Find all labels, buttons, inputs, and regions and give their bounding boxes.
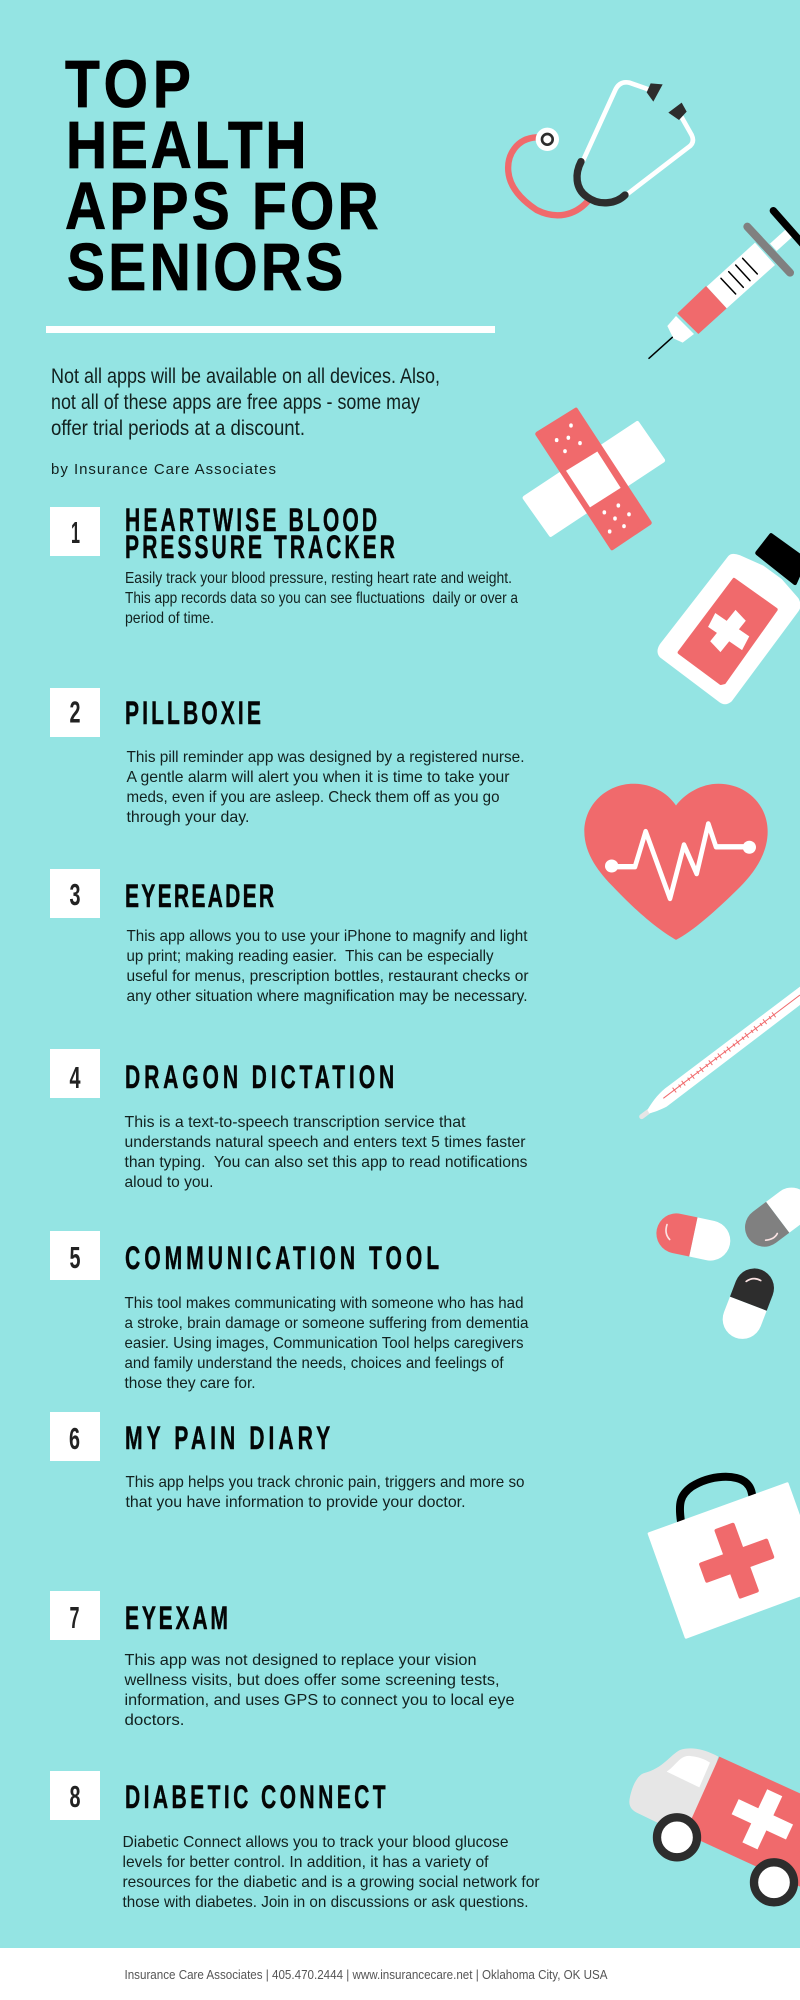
- footer text: Insurance Care Associates | 405.470.2444 | www.insurancecare.net | Oklahoma City, OK USA: [124, 1968, 608, 1982]
- body 4: aloud to you.: [124, 1174, 214, 1191]
- icon: bandage: [525, 410, 663, 548]
- item 3: [50, 869, 529, 1005]
- title: TOP: [65, 48, 191, 122]
- body 6: [126, 1474, 525, 1511]
- heading 6: MY PAIN DIARY: [125, 1419, 330, 1456]
- body 3: This app allows you to use your iPhone to magnify and light: [126, 928, 528, 945]
- number box 8: [50, 1771, 100, 1820]
- title: [65, 48, 379, 305]
- title: SENIORS: [67, 231, 343, 305]
- item 7: [50, 1591, 515, 1729]
- body 2: meds, even if you are asleep. Check them off as you go: [126, 789, 500, 806]
- item 6: [50, 1412, 525, 1511]
- number box 7: 7: [70, 1600, 80, 1635]
- number box 3: 3: [70, 877, 80, 912]
- body 4: than typing. You can also set this app to read notifications: [124, 1154, 528, 1171]
- number box 7: [50, 1591, 100, 1640]
- body 7: [123, 1652, 515, 1729]
- icon: pills: [653, 1180, 800, 1345]
- body 4: understands natural speech and enters text 5 times faster: [124, 1134, 526, 1151]
- title underline: [46, 326, 495, 333]
- body 1: period of time.: [125, 610, 214, 627]
- body 5: This tool makes communicating with someone who has had: [124, 1295, 524, 1312]
- body 3: [126, 928, 529, 1005]
- body 2: This pill reminder app was designed by a registered nurse.: [126, 749, 524, 766]
- body 7: This app was not designed to replace your vision: [124, 1652, 477, 1669]
- title: APPS FOR: [65, 170, 379, 244]
- byline: by Insurance Care Associates: [51, 461, 276, 478]
- body 8: levels for better control. In addition, it has a variety of: [122, 1854, 489, 1871]
- body 6: This app helps you track chronic pain, triggers and more so: [126, 1474, 525, 1491]
- footer band: [0, 1948, 800, 2000]
- heading 7: EYEXAM: [125, 1599, 228, 1636]
- item 1: [50, 501, 518, 627]
- icon: first aid kit: [649, 1477, 800, 1637]
- number box 1: 1: [71, 515, 80, 550]
- number box 6: 6: [69, 1421, 80, 1456]
- body 1: This app records data so you can see fluctuations daily or over a: [125, 590, 518, 607]
- number box 6: [50, 1412, 100, 1461]
- body 4: This is a text-to-speech transcription service that: [124, 1114, 466, 1131]
- item 5: [50, 1231, 529, 1392]
- icon: heart with heartbeat: [584, 784, 768, 940]
- body 4: [124, 1114, 528, 1191]
- intro text: Not all apps will be available on all devices. Also,: [51, 365, 440, 388]
- heading 3: EYEREADER: [125, 877, 274, 914]
- item 4: [50, 1049, 528, 1191]
- body 5: easier. Using images, Communication Tool helps caregivers: [124, 1335, 524, 1352]
- number box 5: [50, 1231, 100, 1280]
- body 1: [125, 570, 518, 627]
- body 5: a stroke, brain damage or someone suffering from dementia: [124, 1315, 529, 1332]
- body 3: useful for menus, prescription bottles, restaurant checks or: [126, 968, 529, 985]
- number box 4: 4: [70, 1060, 81, 1095]
- body 1: Easily track your blood pressure, resting heart rate and weight.: [125, 570, 512, 587]
- body 3: any other situation where magnification may be necessary.: [126, 988, 528, 1005]
- gray pill: [737, 1180, 800, 1254]
- number box 5: 5: [70, 1240, 80, 1275]
- body 3: up print; making reading easier. This can be especially: [126, 948, 494, 965]
- heading 2: PILLBOXIE: [125, 694, 261, 731]
- heading 1: [125, 501, 395, 565]
- title: HEALTH: [66, 109, 307, 183]
- number box 2: [50, 688, 100, 737]
- body 8: Diabetic Connect allows you to track your blood glucose: [122, 1834, 509, 1851]
- icon: syringe: [649, 211, 800, 358]
- number box 2: 2: [70, 694, 80, 730]
- body 8: resources for the diabetic and is a growing social network for: [122, 1874, 540, 1891]
- body 6: that you have information to provide your doctor.: [126, 1494, 466, 1511]
- icon: medicine bottle: [657, 535, 800, 704]
- item 2: [50, 688, 524, 826]
- body 2: [126, 749, 524, 826]
- intro text: offer trial periods at a discount.: [51, 417, 305, 440]
- icon: ambulance: [629, 1748, 800, 1902]
- body 8: those with diabetes. Join in on discussions or ask questions.: [122, 1894, 528, 1911]
- icon: stethoscope: [508, 82, 693, 215]
- icon: thermometer: [642, 987, 800, 1117]
- body 5: those they care for.: [124, 1375, 256, 1392]
- heading 4: DRAGON DICTATION: [125, 1058, 394, 1095]
- body 2: A gentle alarm will alert you when it is time to take your: [126, 769, 510, 786]
- intro text: not all of these apps are free apps - some may: [51, 391, 420, 414]
- heading 8: DIABETIC CONNECT: [125, 1778, 386, 1815]
- heading 5: COMMUNICATION TOOL: [125, 1239, 439, 1276]
- body 7: doctors.: [124, 1712, 184, 1729]
- body 7: wellness visits, but does offer some screening tests,: [123, 1672, 499, 1689]
- number box 4: [50, 1049, 100, 1098]
- heading 1: PRESSURE TRACKER: [125, 528, 395, 565]
- black pill: [717, 1263, 780, 1345]
- body 5: and family understand the needs, choices and feelings of: [124, 1355, 504, 1372]
- number box 1: [50, 507, 100, 556]
- item 8: [50, 1771, 540, 1911]
- body 5: [124, 1295, 529, 1392]
- number box 8: 8: [70, 1779, 80, 1814]
- body 8: [122, 1834, 540, 1911]
- body 7: information, and uses GPS to connect you to local eye: [124, 1692, 515, 1709]
- coral pill: [653, 1210, 734, 1264]
- number box 3: [50, 869, 100, 918]
- body 2: through your day.: [126, 809, 250, 826]
- intro text: [51, 365, 440, 440]
- heading 1: HEARTWISE BLOOD: [125, 501, 377, 538]
